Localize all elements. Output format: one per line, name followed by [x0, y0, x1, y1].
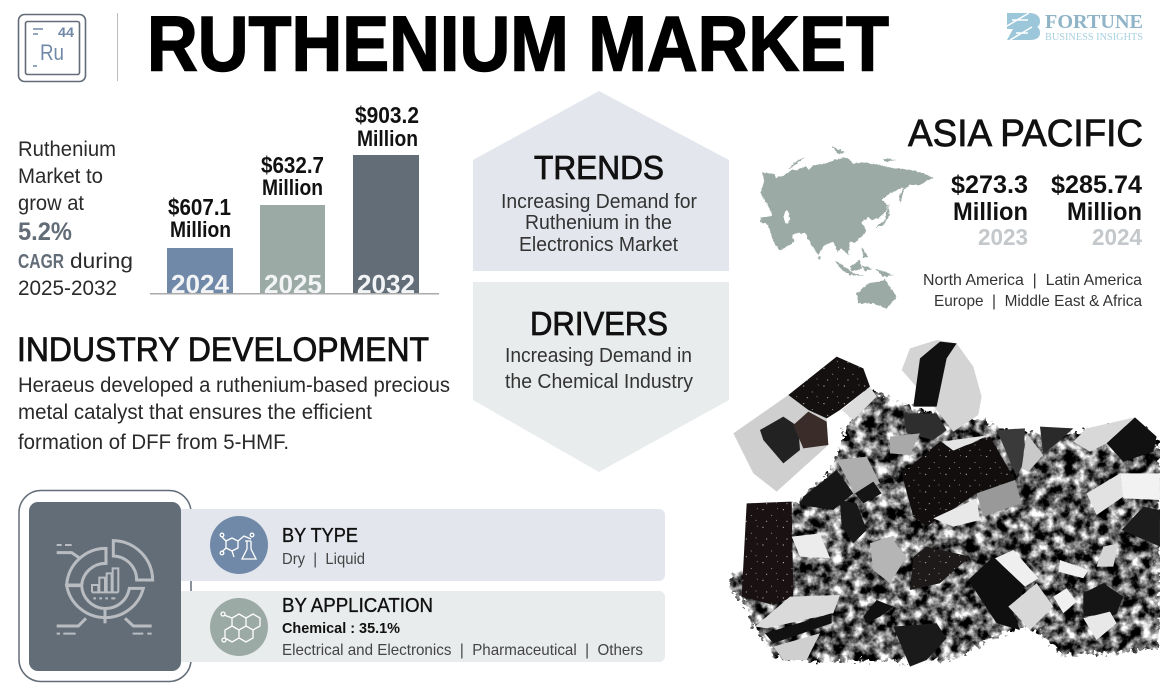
- panel: by application: Chemical : 35.1%: [282, 620, 400, 637]
- bar: 2032: Million: [357, 126, 418, 151]
- stat: Asia Pacific 2023: Million: [953, 198, 1028, 226]
- text block: CAGR summary: Ruthenium: [18, 138, 116, 161]
- panel: drivers: Increasing Demand in: [505, 345, 692, 367]
- text block: CAGR summary: CAGR: [18, 251, 64, 273]
- panel: segmentation icon background: [29, 502, 181, 671]
- logo: Fortune Business Insights: FORTUNE: [1045, 11, 1143, 33]
- logo: Fortune Business Insights: [1007, 11, 1143, 43]
- text block: CAGR summary: [18, 138, 133, 300]
- text block: industry development: metal catalyst that ensures the efficient: [18, 401, 372, 424]
- panel: segmentation icon frame: [19, 490, 191, 682]
- text block: CAGR summary: 2025-2032: [18, 277, 117, 300]
- panel: drivers: the Chemical Industry: [505, 371, 693, 393]
- bar chart: market size: [150, 102, 439, 299]
- icon: chart dashboard: [57, 541, 153, 634]
- bar: 2025: Million: [262, 175, 323, 200]
- stat: Asia Pacific 2024: Million: [1067, 198, 1142, 226]
- bar: 2032: 2032: [357, 269, 415, 299]
- panel: trends: TRENDS: [534, 149, 664, 186]
- panel: by type: Dry | Liquid: [282, 551, 365, 568]
- bar: 2024: Million: [170, 217, 231, 242]
- icon: ruthenium element tile: Ru: [40, 40, 64, 65]
- stat: Asia Pacific 2023: $273.3: [951, 171, 1028, 199]
- bar: 2024: 2024: [171, 269, 230, 299]
- stat: Asia Pacific 2023: 2023: [978, 224, 1028, 250]
- bar: 2024: [167, 194, 233, 299]
- text block: CAGR summary: grow at: [18, 192, 84, 215]
- stat: Asia Pacific 2024: [1051, 171, 1142, 250]
- panel: by type: [181, 509, 665, 581]
- panel: trends: [473, 91, 729, 271]
- text block: other regions: North America | Latin America: [923, 272, 1142, 289]
- title: RUTHENIUM MARKET: [147, 0, 889, 88]
- panel: by application: [181, 591, 665, 662]
- heading: Asia Pacific: ASIA PACIFIC: [908, 113, 1143, 155]
- panel: trends: Electronics Market: [519, 234, 678, 256]
- text block: CAGR summary: during: [70, 250, 133, 273]
- panel: trends: Increasing Demand for: [501, 191, 697, 213]
- panel: drivers: DRIVERS: [530, 305, 668, 342]
- stat: Asia Pacific 2024: 2024: [1092, 224, 1142, 250]
- bar: 2032: [353, 102, 419, 299]
- icon: ruthenium element tile: 44: [58, 24, 74, 40]
- text block: industry development: [18, 374, 450, 454]
- panel: by application: Electrical and Electronics | Pharmaceutical | Others: [282, 642, 643, 659]
- panel: drivers: [473, 282, 729, 472]
- icon: molecule and flask: [210, 516, 268, 574]
- text block: industry development: formation of DFF from 5-HMF.: [18, 431, 289, 454]
- panel: by application: BY APPLICATION: [282, 595, 433, 617]
- icon: hexagon molecule: [210, 598, 268, 656]
- bar: 2025: 2025: [264, 269, 322, 299]
- map: Asia Pacific: [760, 146, 934, 308]
- heading: industry development: INDUSTRY DEVELOPMENT: [17, 331, 429, 369]
- image: ruthenium crystals: [728, 340, 1160, 667]
- header divider: [117, 13, 118, 81]
- bar: 2025: $632.7: [261, 152, 324, 178]
- icon: ruthenium element tile: [18, 14, 86, 82]
- text block: industry development: Heraeus developed a ruthenium-based precious: [18, 374, 450, 397]
- logo: Fortune Business Insights: BUSINESS INSIGHTS: [1045, 32, 1143, 43]
- text block: CAGR summary: 5.2%: [18, 218, 72, 246]
- panel: trends: Ruthenium in the: [525, 212, 672, 234]
- text block: CAGR summary: Market to: [18, 165, 103, 188]
- bar: 2024: $607.1: [168, 194, 231, 220]
- bar: 2025: [260, 152, 325, 299]
- stat: Asia Pacific 2023: [951, 171, 1028, 250]
- text block: other regions: Europe | Middle East & Africa: [934, 293, 1142, 310]
- bar: 2032: $903.2: [355, 102, 419, 128]
- panel: by type: BY TYPE: [282, 525, 358, 547]
- stat: Asia Pacific 2024: $285.74: [1051, 171, 1142, 199]
- text block: other regions: [923, 272, 1142, 310]
